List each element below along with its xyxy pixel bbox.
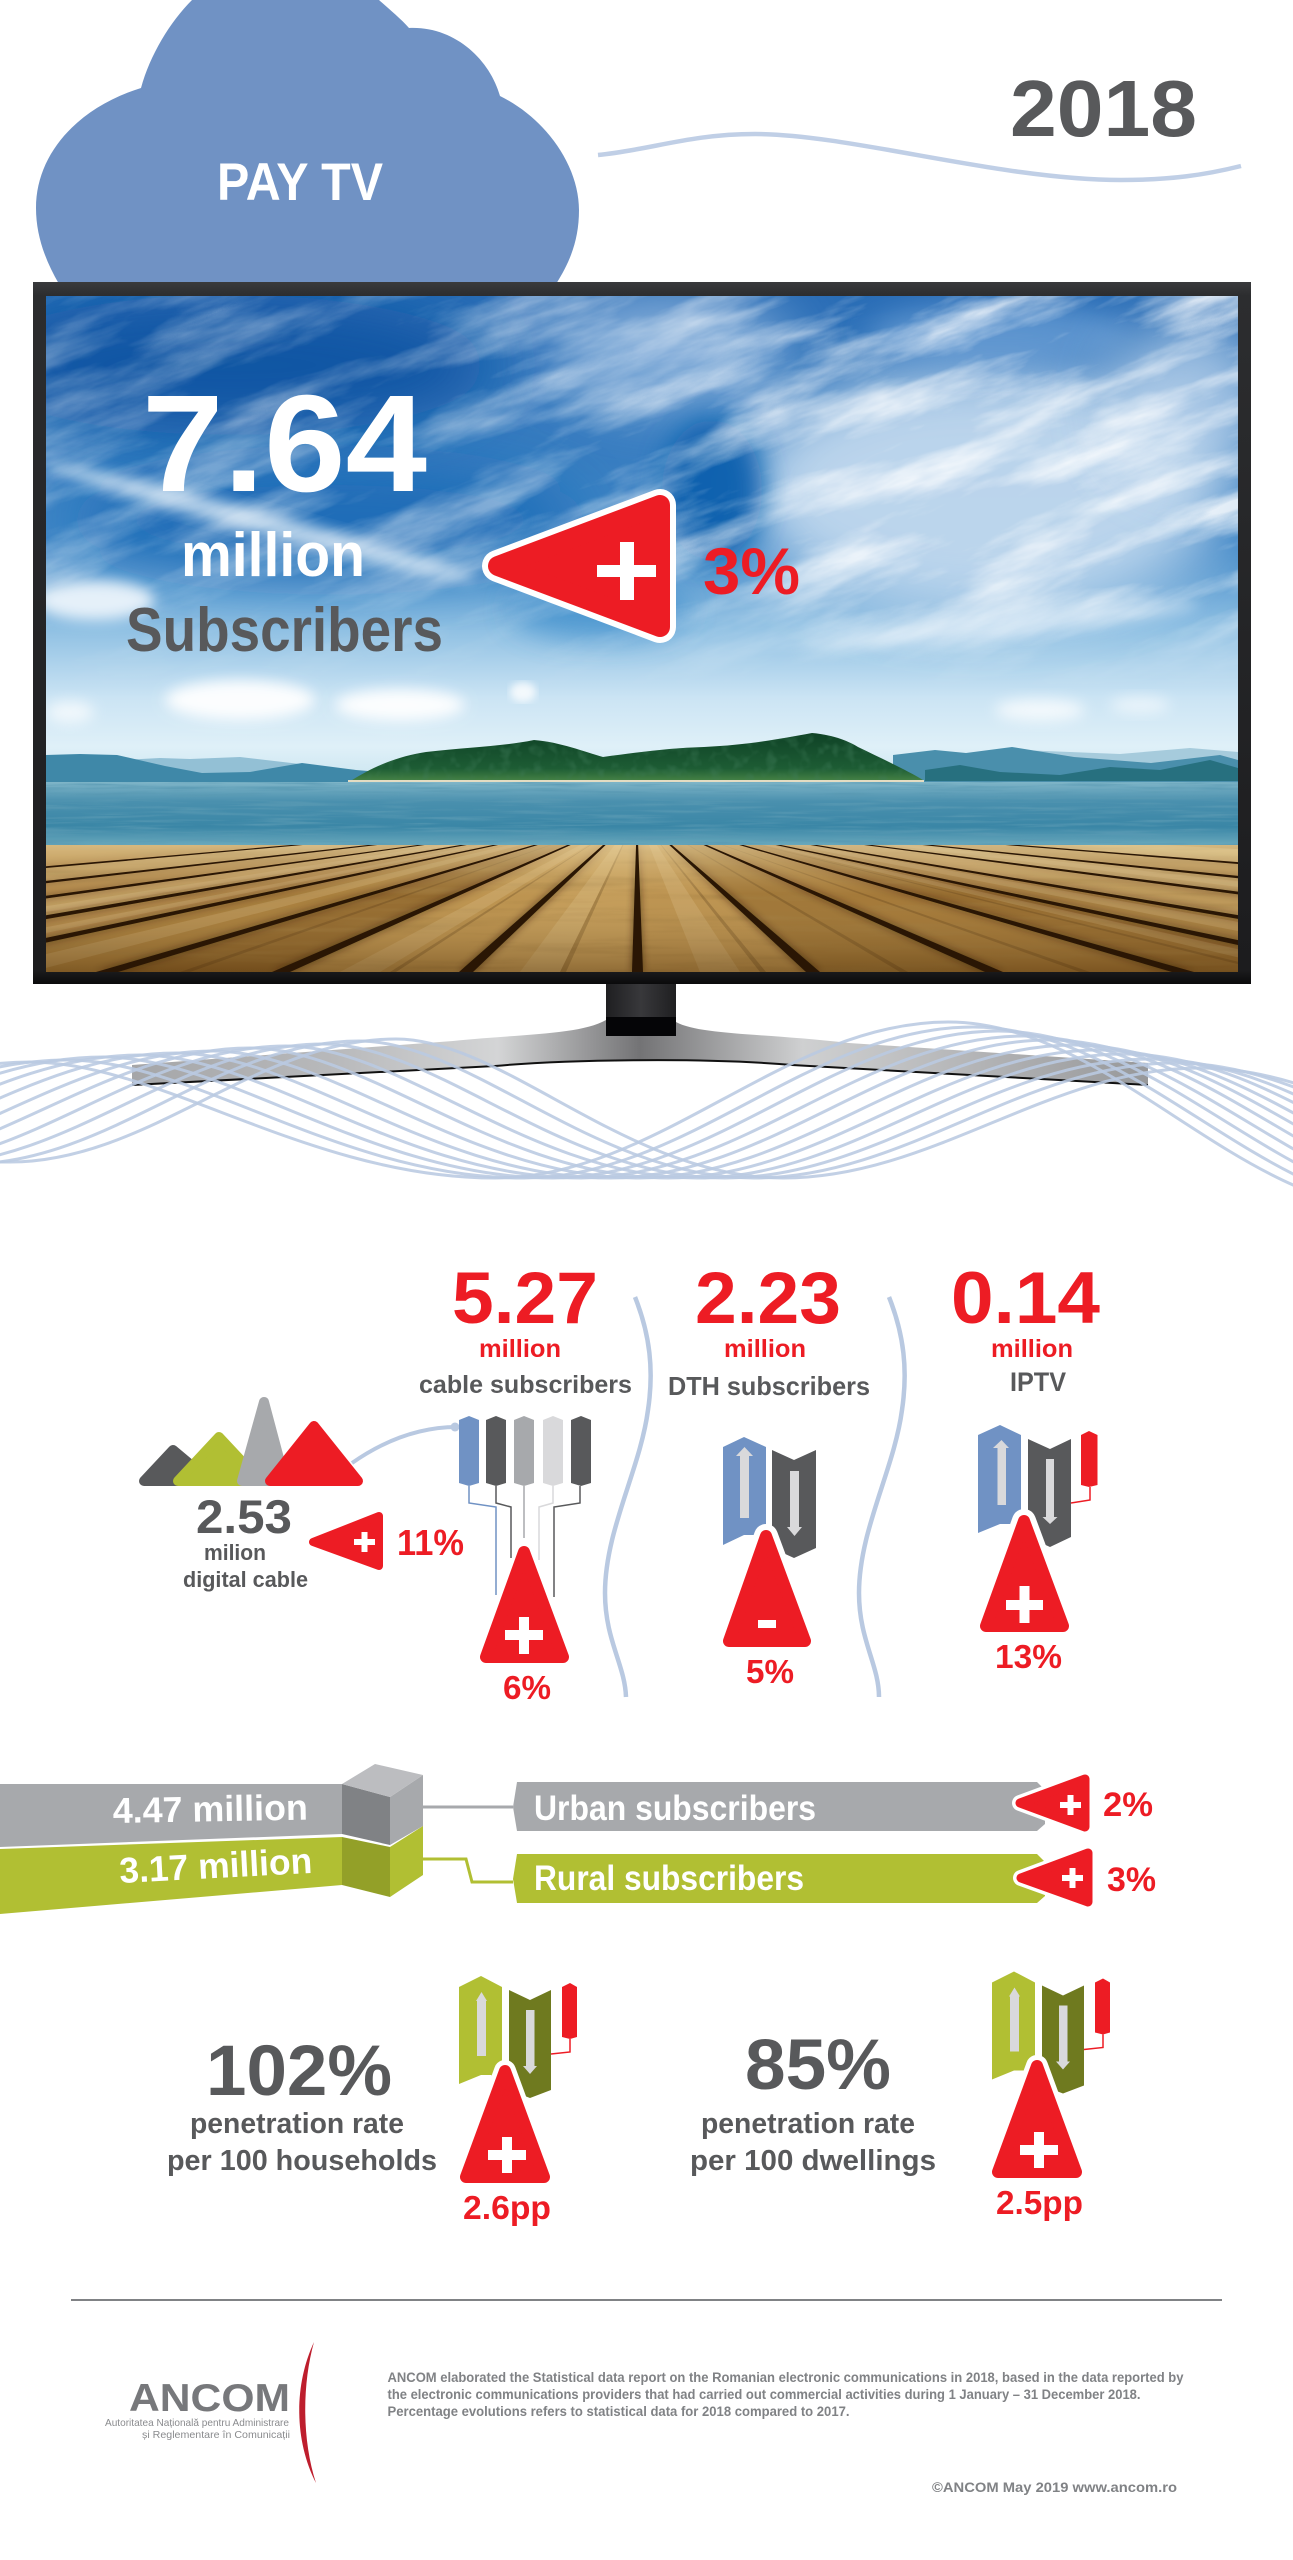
panel: digital cable xyxy=(144,1402,464,1592)
logo crescent xyxy=(299,2342,316,2483)
tv frame xyxy=(33,282,1251,984)
lake xyxy=(46,782,1238,846)
households label line 2: per 100 households xyxy=(167,2145,437,2177)
tv screen: sky and lake landscape xyxy=(46,296,1238,972)
digital cable label: digital cable xyxy=(183,1567,308,1592)
footer note: ANCOM elaborated the Statistical data report on the Romanian electronic communications in 2018, based in the data reported by xyxy=(388,2370,1184,2385)
icon: mountains xyxy=(144,1402,358,1481)
rural cube xyxy=(342,1826,423,1897)
icon: rural plus triangle xyxy=(1021,1853,1088,1902)
rural label: Rural subscribers xyxy=(534,1859,804,1898)
rural count: 3.17 million xyxy=(118,1840,313,1891)
logo tagline line 1: Autoritatea Națională pentru Administrare xyxy=(105,2417,289,2429)
urban label: Urban subscribers xyxy=(534,1789,816,1828)
island xyxy=(349,733,923,782)
households label line 1: penetration rate xyxy=(190,2108,404,2140)
icon: arrows xyxy=(992,1972,1110,2094)
divider wave 1 xyxy=(605,1297,651,1697)
urban ribbon xyxy=(513,1782,1045,1831)
shoreline xyxy=(348,780,924,782)
icon: arrows xyxy=(459,1976,577,2098)
dwellings label line 1: penetration rate xyxy=(701,2108,915,2140)
growth 13%: 13% xyxy=(995,1638,1062,1675)
IPTV label: IPTV xyxy=(1010,1367,1066,1397)
urban connector xyxy=(423,1806,513,1808)
DTH label: DTH subscribers xyxy=(668,1371,870,1401)
growth 2.5pp: 2.5pp xyxy=(996,2184,1083,2221)
digital cable figure: 2.53 xyxy=(196,1490,292,1543)
growth 11%: 11% xyxy=(397,1522,464,1563)
year: 2018 xyxy=(1010,64,1197,153)
icon: up and down arrows with box xyxy=(978,1425,1098,1547)
million label: million xyxy=(991,1335,1073,1363)
households rate: 102% xyxy=(206,2032,392,2111)
urban cube xyxy=(342,1764,423,1845)
million label: million xyxy=(181,521,365,590)
footer note: the electronic communications providers that had carried out commercial activities during 1 January – 31 December 2018. xyxy=(388,2387,1140,2402)
panel: IPTV xyxy=(951,1258,1100,1675)
sky xyxy=(46,296,1238,771)
divider wave 2 xyxy=(859,1297,905,1697)
million label: million xyxy=(479,1335,561,1363)
subscribers label: Subscribers xyxy=(126,596,443,665)
panel: penetration per households xyxy=(167,1976,577,2226)
growth 2.6pp: 2.6pp xyxy=(463,2189,551,2226)
rural growth 3%: 3% xyxy=(1107,1861,1156,1899)
total subscribers figure: 7.64 xyxy=(142,367,427,521)
urban count: 4.47 million xyxy=(112,1787,308,1831)
logo wordmark: ANCOM xyxy=(129,2377,290,2420)
icon: plus triangle xyxy=(486,1552,563,1657)
urban band xyxy=(0,1784,342,1847)
icon: plus triangle xyxy=(498,505,660,627)
icon: plus triangle xyxy=(998,2066,1076,2172)
panel: penetration per dwellings xyxy=(690,1972,1110,2221)
tv stand xyxy=(132,984,1148,1085)
decline 5%: 5% xyxy=(746,1653,794,1690)
cloud heading shape xyxy=(36,0,579,284)
copyright: ©ANCOM May 2019 www.ancom.ro xyxy=(932,2479,1177,2495)
icon: plus triangle xyxy=(986,1521,1063,1626)
decorative wave lines xyxy=(0,1022,1293,1210)
panel: DTH subscribers xyxy=(668,1258,870,1690)
DTH figure: 2.23 xyxy=(695,1258,841,1339)
milion label: milion xyxy=(204,1540,266,1565)
million label: million xyxy=(724,1335,806,1363)
rural connector xyxy=(423,1859,513,1882)
header wave line xyxy=(598,134,1241,180)
icon: cable connectors xyxy=(459,1416,591,1597)
icon: up and down arrows xyxy=(723,1437,816,1558)
growth 6%: 6% xyxy=(503,1669,551,1706)
logo: ANCOM xyxy=(105,2342,316,2483)
panel: cable subscribers xyxy=(419,1258,632,1706)
rural ribbon xyxy=(513,1854,1045,1903)
title: Pay TV: PAY TV xyxy=(217,153,383,212)
icon: minus triangle xyxy=(729,1536,805,1641)
icon: plus triangle xyxy=(466,2071,544,2177)
distant mountains xyxy=(46,747,1238,784)
urban growth 2%: 2% xyxy=(1103,1786,1153,1824)
dwellings label line 2: per 100 dwellings xyxy=(690,2145,936,2177)
IPTV figure: 0.14 xyxy=(951,1258,1100,1339)
connector curve xyxy=(352,1422,460,1463)
rural band xyxy=(0,1837,342,1914)
logo tagline line 2: și Reglementare în Comunicații xyxy=(142,2429,290,2441)
dwellings rate: 85% xyxy=(745,2026,891,2105)
cable figure: 5.27 xyxy=(452,1258,598,1339)
icon: urban plus triangle xyxy=(1020,1779,1085,1827)
wooden deck xyxy=(46,845,1238,972)
growth 3%: 3% xyxy=(703,534,800,608)
panel: urban and rural xyxy=(0,1764,1156,1914)
cable subscribers label: cable subscribers xyxy=(419,1371,632,1399)
footer note xyxy=(388,2370,1184,2419)
icon: plus triangle xyxy=(313,1516,379,1566)
footer note: Percentage evolutions refers to statistical data for 2018 compared to 2017. xyxy=(388,2404,850,2419)
television xyxy=(33,282,1251,1086)
